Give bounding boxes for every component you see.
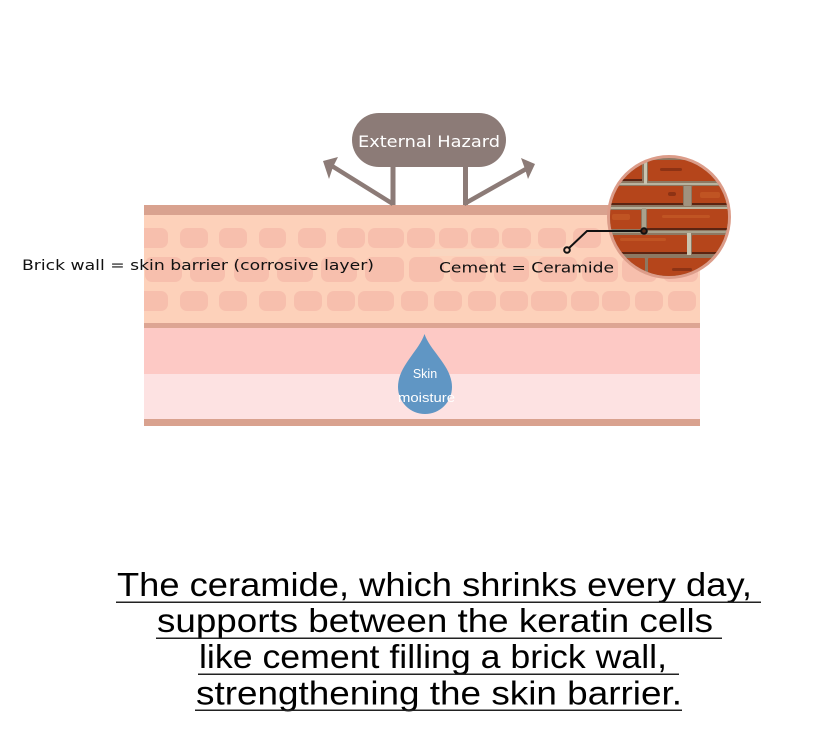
right support post <box>463 165 468 205</box>
drop label line 1: Skin <box>413 367 437 381</box>
line 2: supports between the keratin cells <box>157 602 713 639</box>
brick row 2 <box>145 257 698 282</box>
bottom skin stripe <box>144 419 700 426</box>
line 3: like cement filling a brick wall, <box>199 638 667 675</box>
line 1: The ceramide, which shrinks every day, <box>117 566 752 603</box>
top skin stripe <box>144 205 700 215</box>
line 4: strengthening the skin barrier. <box>196 674 682 712</box>
hazard label: External Hazard <box>358 132 500 151</box>
hazard pill <box>352 113 506 167</box>
brick texture <box>610 158 728 276</box>
panel: skin cross-section <box>144 205 700 426</box>
arrow: deflected left <box>323 157 393 204</box>
infographic canvas <box>24 113 761 712</box>
pink dermis layer <box>144 328 700 374</box>
drop shape <box>398 334 452 414</box>
label: brick wall: Brick wall = skin barrier (corrosive layer) <box>22 258 374 274</box>
cement band <box>430 249 560 256</box>
brick row 3 <box>144 291 696 311</box>
pale lower layer <box>144 374 700 420</box>
icon: magnified brick wall <box>605 153 733 281</box>
icon: external hazard pill with deflected arrows <box>323 113 535 205</box>
text block: ceramide explanation <box>116 566 761 712</box>
left support post <box>390 165 396 205</box>
arrow: deflected right <box>464 158 535 204</box>
brick row 1 <box>144 228 601 248</box>
drop label line 2: moisture <box>398 391 455 405</box>
label: cement: Cement = Ceramide <box>439 260 614 276</box>
corneous layer background <box>144 205 700 326</box>
icon: skin moisture drop <box>398 334 455 414</box>
icon: cement leader line <box>564 228 647 253</box>
divider stripe <box>144 323 700 328</box>
lens ring <box>607 155 731 279</box>
